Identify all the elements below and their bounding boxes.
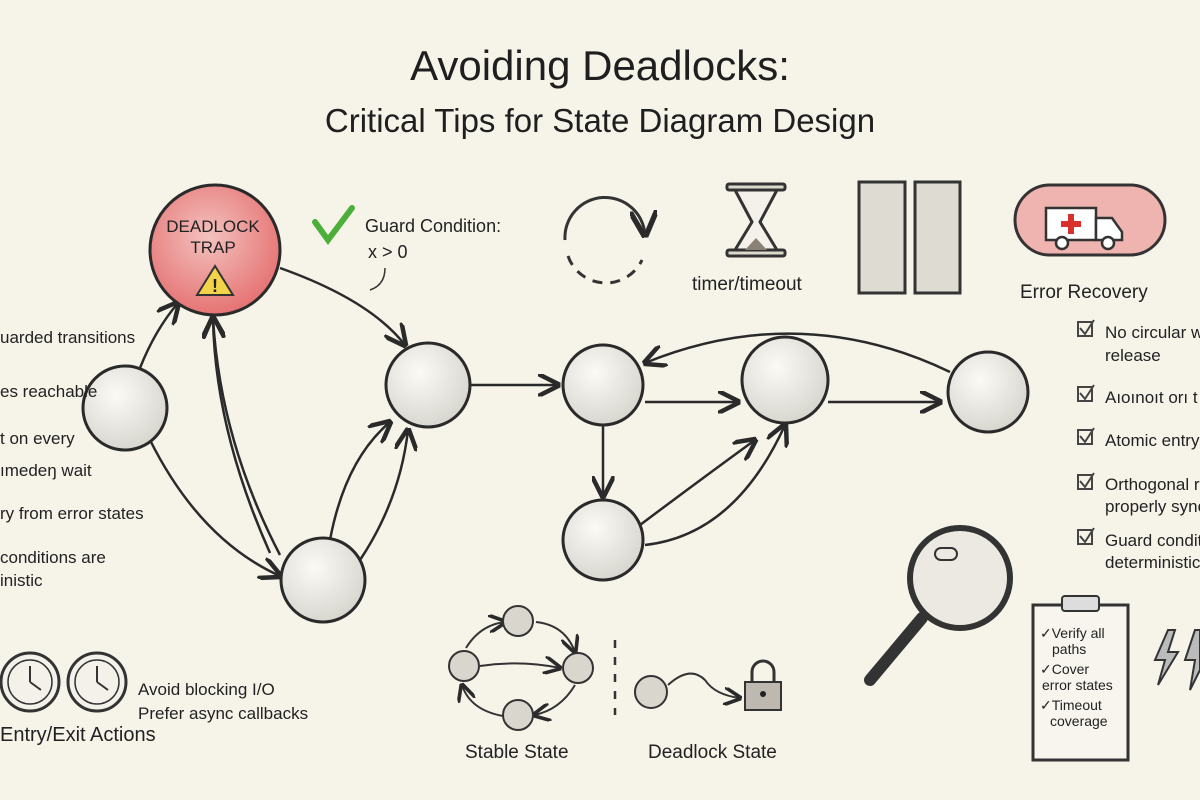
- icon: hourglass: timer/timeout: [692, 274, 803, 295]
- arrows: main diagram: [140, 268, 950, 576]
- icon: hourglass: [692, 184, 803, 295]
- states: diagram circles: [83, 337, 1028, 622]
- title: Critical Tips for State Diagram Design: [325, 102, 875, 139]
- text: blocking tips: Entry/Exit Actions: [0, 724, 156, 746]
- text: blocking tips: [0, 680, 308, 746]
- left tips text: inistic: [0, 571, 43, 590]
- icon: pause bars: [859, 182, 960, 293]
- checklist right: Atomic entry: [1105, 431, 1200, 450]
- title: [325, 42, 875, 139]
- left tips text: ımedeŋ wait: [0, 461, 92, 480]
- icon: magnifier: [870, 528, 1010, 680]
- checklist right: deterministic: [1105, 553, 1200, 572]
- clipboard: ✓Cover: [1040, 661, 1089, 677]
- stable state diagram: [449, 606, 593, 763]
- state: deadlock trap: DEADLOCK: [166, 217, 260, 236]
- deadlock state diagram: Deadlock State: [648, 742, 777, 763]
- checklist right: [1078, 320, 1200, 572]
- icon: circular arrow: [565, 197, 645, 283]
- left tips text: [0, 328, 144, 590]
- icon: ambulance error recovery: Error Recovery: [1020, 282, 1148, 303]
- checklist right: Orthogonal r: [1105, 475, 1200, 494]
- state: deadlock trap: [150, 185, 280, 315]
- text: blocking tips: Avoid blocking I/O: [138, 680, 275, 699]
- icon: ambulance error recovery: [1015, 185, 1165, 303]
- guard condition callout: Guard Condition:: [365, 216, 501, 236]
- icon: lightning: [1155, 630, 1200, 690]
- guard condition callout: x > 0: [368, 242, 408, 262]
- title: Avoiding Deadlocks:: [410, 42, 790, 89]
- clipboard: ✓Timeout: [1040, 697, 1102, 713]
- state: deadlock trap: !: [212, 276, 218, 296]
- left tips text: t on every: [0, 429, 75, 448]
- clipboard: error states: [1042, 677, 1113, 693]
- checklist right: release: [1105, 346, 1161, 365]
- left tips text: uarded transitions: [0, 328, 135, 347]
- clipboard: coverage: [1050, 713, 1108, 729]
- left tips text: conditions are: [0, 548, 106, 567]
- icon: clocks: [1, 653, 126, 711]
- deadlock state diagram: [635, 661, 781, 763]
- text: blocking tips: Prefer async callbacks: [138, 704, 308, 723]
- clipboard: [1033, 596, 1128, 760]
- clipboard: paths: [1052, 641, 1086, 657]
- clipboard: ✓Verify all: [1040, 625, 1105, 641]
- left tips text: es reachable: [0, 382, 97, 401]
- checklist right: Aıoınoıt orı t: [1105, 388, 1198, 407]
- guard condition callout: [315, 208, 501, 290]
- state: deadlock trap: TRAP: [190, 238, 236, 257]
- stable state diagram: Stable State: [465, 742, 569, 763]
- left tips text: ry from error states: [0, 504, 144, 523]
